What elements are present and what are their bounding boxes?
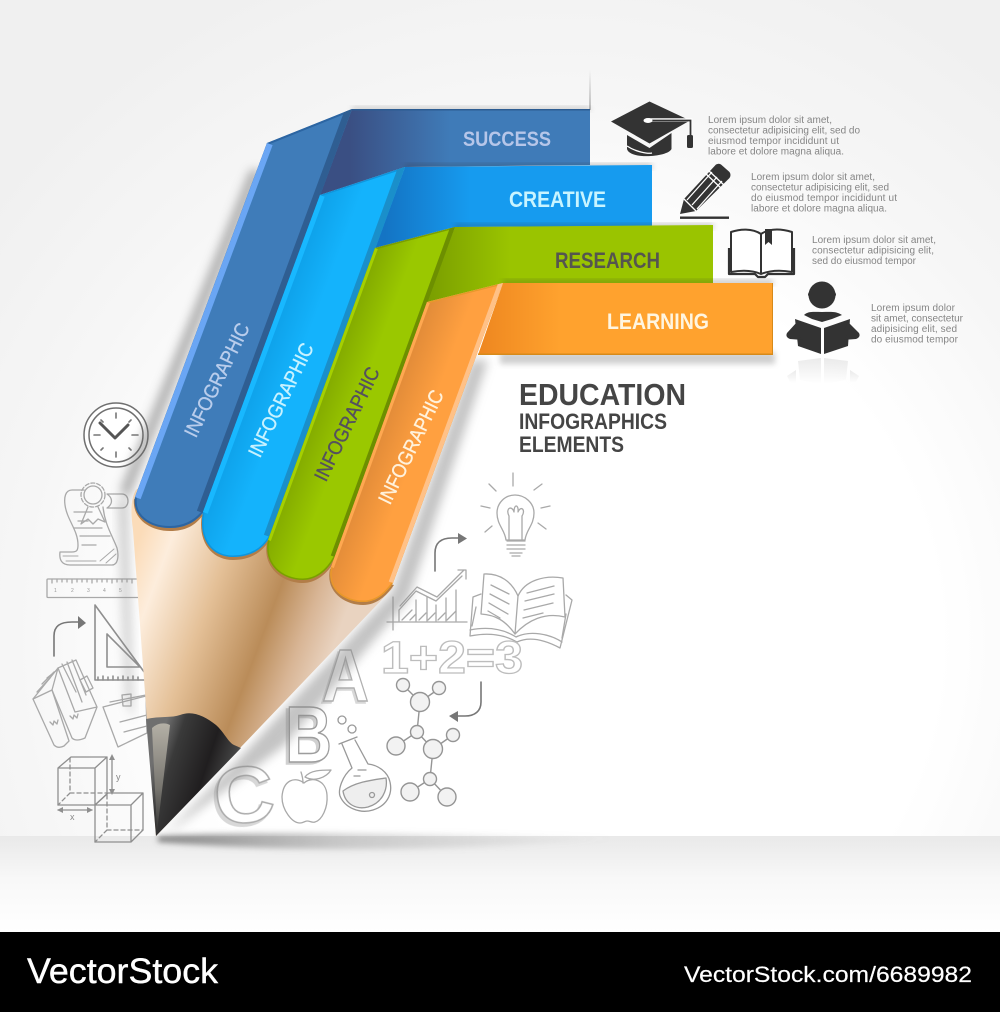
ruler numbers: 5 [119, 588, 122, 594]
horizontal band [427, 225, 713, 302]
icon: graduation cap [611, 102, 693, 156]
strip label: INFOGRAPHIC [375, 387, 449, 508]
icon: clock [84, 403, 148, 467]
wood body [131, 400, 393, 836]
band shadow [503, 280, 773, 285]
band top edge [352, 109, 590, 110]
fold top shadow [352, 107, 590, 111]
icon: diploma [60, 483, 128, 565]
strip highlights [267, 227, 455, 580]
icon: pencil [680, 164, 730, 219]
strip highlights [135, 109, 352, 528]
title line 3: ELEMENTS [519, 432, 624, 457]
band shadow [405, 164, 652, 169]
text block: learning [871, 303, 964, 346]
text block: success: eiusmod tempor incididunt ut [708, 136, 839, 147]
text block: research [812, 235, 936, 267]
text block: learning: adipisicing elit, sed [871, 324, 957, 335]
text block: learning: Lorem ipsum dolor [871, 303, 956, 314]
pencil lead [146, 713, 241, 836]
text block: creative: consectetur adipisicing elit, sed [751, 182, 889, 194]
icon: apple [282, 770, 331, 823]
cap shadow [266, 542, 336, 583]
icon: molecule [387, 678, 460, 806]
strip shadow [120, 170, 262, 500]
icon: light bulb [481, 473, 550, 556]
slanted strip [135, 109, 352, 528]
text block: success: labore et dolore magna aliqua. [708, 146, 844, 158]
strip label: INFOGRAPHIC [311, 364, 385, 485]
text block: research: sed do eiusmod tempor [812, 256, 917, 267]
strip highlights [330, 283, 503, 602]
arrow: chart to bulb [435, 533, 467, 571]
equation 1+2=3: 1+2=3 [381, 632, 523, 683]
pencil band: creative (cyan) [201, 164, 652, 560]
drop shadow below band [500, 352, 775, 364]
letter A: A [322, 634, 369, 717]
pencil band: research (green) [266, 224, 713, 583]
doodle sketches right of pencil [209, 473, 572, 842]
text block: success: Lorem ipsum dolor sit amet, [708, 115, 832, 126]
title line 2: INFOGRAPHICS [519, 409, 667, 434]
brand name: VectorStock [27, 952, 219, 991]
cap shadow [201, 514, 271, 560]
watermark bar [0, 932, 1000, 1012]
icon: person reading [786, 282, 860, 354]
arrow: up to set square [54, 616, 86, 656]
cap shadow [329, 569, 394, 605]
letter C: C [209, 747, 278, 842]
axis label y: y [116, 772, 121, 782]
horizontal band [478, 283, 773, 355]
horizontal band [320, 109, 590, 195]
text block: success [708, 115, 860, 158]
shadow along pencil edges [118, 360, 488, 835]
pencil wood and lead [118, 360, 488, 836]
icon: cubes [57, 754, 143, 842]
text block: research: consectetur adipisicing elit, [812, 246, 934, 256]
ruler numbers: 4 [103, 588, 106, 594]
text block: creative: labore et dolore magna aliqua. [751, 204, 887, 214]
strip label: INFOGRAPHIC [181, 320, 255, 441]
band label: LEARNING [607, 309, 709, 334]
pencil band: success (blue) [120, 107, 590, 531]
icon: open book [729, 229, 794, 277]
image url: VectorStock.com/6689982 [684, 962, 972, 987]
icon: flask [338, 716, 391, 811]
text block: learning: sit amet, consectetur [871, 314, 964, 324]
text block: creative: do eiusmod tempor incididunt ut [751, 193, 897, 204]
ruler numbers: 1 [54, 588, 57, 594]
band label: RESEARCH [555, 248, 660, 273]
icon: note papers [103, 694, 147, 747]
text block: creative [751, 172, 897, 214]
icon: set square [95, 605, 150, 680]
slanted strip [267, 227, 455, 580]
strip label: INFOGRAPHIC [245, 340, 319, 461]
band edges [478, 283, 773, 355]
axis label x: x [70, 812, 75, 822]
ruler numbers [54, 588, 122, 594]
doodle sketches left of pencil [33, 403, 150, 842]
icon: ruler [47, 579, 139, 598]
icon: folders [33, 660, 97, 747]
strip highlights [202, 167, 405, 557]
icon reflection [787, 358, 859, 384]
text block: success: consectetur adipisicing elit, sed do [708, 126, 860, 136]
slanted strip [330, 283, 503, 602]
ruler numbers: 2 [71, 588, 74, 594]
floor shadow of pencil [158, 833, 620, 849]
arrow: equation to molecule [449, 682, 481, 722]
icon: growth chart [387, 570, 467, 630]
ruler numbers: 3 [87, 588, 90, 594]
horizontal band [375, 165, 652, 248]
icon: open book [470, 574, 572, 648]
text block: learning: do eiusmod tempor [871, 334, 959, 346]
letter B: B [285, 690, 332, 779]
text block: creative: Lorem ipsum dolor sit amet, [751, 172, 875, 183]
title line 1: EDUCATION [519, 377, 686, 412]
text block: research: Lorem ipsum dolor sit amet, [812, 235, 936, 246]
band shadow [455, 224, 713, 229]
slanted strip [202, 167, 405, 557]
cap shadow [134, 499, 203, 531]
title [519, 377, 686, 457]
band label: SUCCESS [463, 128, 551, 151]
band label: CREATIVE [509, 187, 606, 212]
pencil band: learning (orange) [329, 280, 775, 605]
